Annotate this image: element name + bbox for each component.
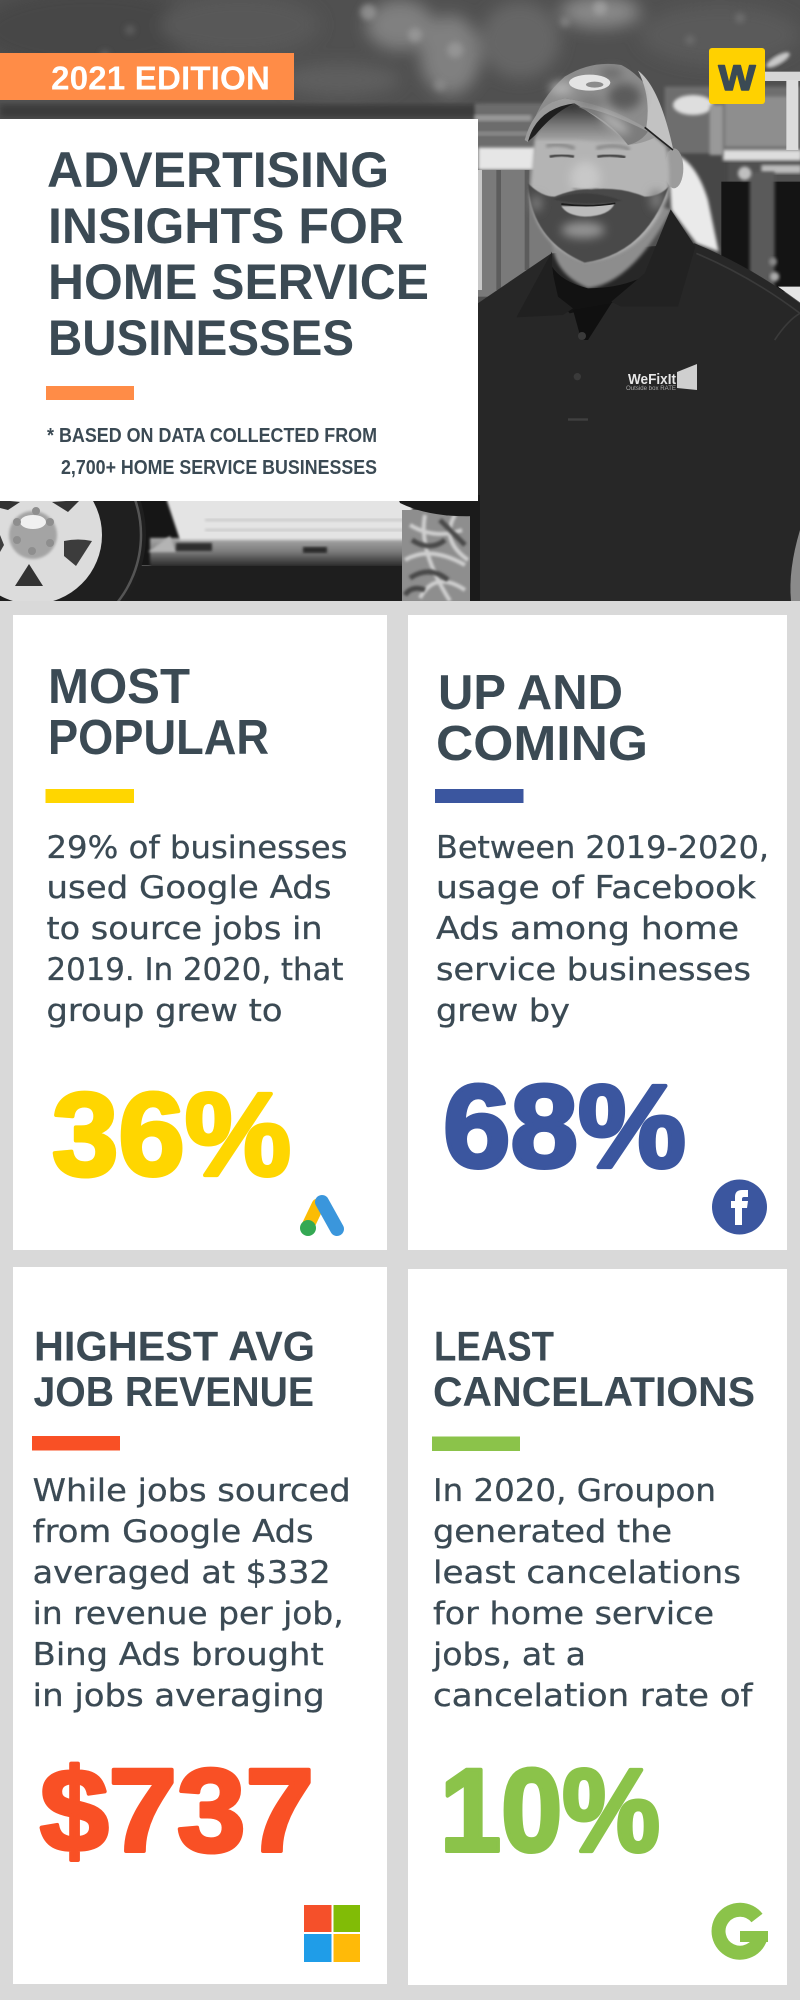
wheel — [0, 501, 146, 601]
logo badge: W: W — [718, 59, 756, 98]
big number: 68% — [443, 1061, 686, 1193]
body text: While jobs sourced — [33, 1473, 351, 1509]
cap camo patches — [550, 68, 641, 137]
nose — [570, 162, 600, 189]
edition banner — [0, 53, 294, 100]
bottom-left white truck — [124, 501, 414, 601]
body text: Bing Ads brought — [33, 1637, 324, 1673]
title: ADVERTISING — [47, 142, 389, 198]
icon: groupon G — [719, 1910, 768, 1953]
body text: averaged at $332 — [33, 1555, 331, 1591]
face — [528, 134, 670, 262]
beard — [528, 183, 669, 263]
title — [47, 142, 429, 366]
background truck and van — [475, 50, 800, 303]
body text: 2019. In 2020, that — [46, 952, 344, 988]
accent bar — [432, 1436, 520, 1451]
panel: highest avg job revenue — [13, 1267, 387, 1984]
body text — [33, 1473, 351, 1714]
body text: from Google Ads — [33, 1514, 314, 1550]
panel: up and coming — [408, 615, 787, 1250]
heading: JOB REVENUE — [34, 1368, 314, 1415]
undershirt — [552, 267, 640, 313]
title panel — [0, 119, 478, 501]
moustache and mouth — [556, 194, 620, 203]
accent bar — [46, 386, 134, 400]
tattooed arm — [398, 495, 800, 601]
body text: cancelation rate of — [433, 1678, 754, 1714]
source note: * BASED ON DATA COLLECTED FROM — [47, 425, 377, 447]
logo badge: W — [709, 48, 765, 104]
heading: POPULAR — [48, 711, 269, 765]
icon: google ads — [300, 1202, 337, 1236]
body text: grew by — [436, 993, 570, 1029]
accent bar — [32, 1436, 120, 1450]
neck — [552, 200, 671, 288]
body text: usage of Facebook — [436, 870, 756, 906]
accent bar — [435, 789, 524, 803]
body text: generated the — [433, 1514, 672, 1550]
shirt logo: WeFixIt — [628, 371, 676, 388]
body text — [46, 830, 348, 1029]
body text: 29% of businesses — [46, 830, 348, 866]
big number: 10% — [440, 1745, 660, 1877]
heading — [436, 666, 648, 771]
icon: facebook — [712, 1180, 767, 1234]
icon: microsoft — [304, 1905, 360, 1962]
heading: LEAST — [434, 1322, 554, 1370]
shirt — [468, 243, 800, 607]
panel: most popular — [13, 615, 387, 1250]
accent bar — [46, 789, 134, 803]
man: shirt, neck, head and cap — [468, 64, 800, 607]
title: INSIGHTS FOR — [48, 198, 404, 254]
heading — [48, 660, 269, 765]
big number: 36% — [52, 1069, 291, 1201]
forehead shade — [535, 103, 628, 145]
title: HOME SERVICE — [48, 254, 429, 310]
heading: COMING — [436, 717, 648, 771]
body text: Ads among home — [436, 911, 739, 947]
body text — [436, 830, 769, 1029]
heading — [433, 1322, 755, 1415]
body text: in revenue per job, — [33, 1596, 344, 1632]
panel: least cancelations — [408, 1269, 787, 1985]
body text: In 2020, Groupon — [433, 1473, 716, 1509]
shirt logo — [626, 364, 697, 392]
body text: jobs, at a — [432, 1637, 586, 1673]
heading: HIGHEST AVG — [34, 1322, 315, 1370]
edition banner: 2021 EDITION — [51, 60, 270, 96]
body text: least cancelations — [433, 1555, 741, 1591]
placket buttons — [578, 332, 586, 340]
eyes and brows — [546, 145, 630, 149]
body text: service businesses — [436, 952, 751, 988]
ear — [665, 148, 683, 188]
body text: used Google Ads — [46, 870, 332, 906]
body text — [432, 1473, 754, 1714]
cap crown — [536, 64, 653, 133]
shirt logo: Outside box RATE — [626, 386, 676, 392]
heading: MOST — [48, 660, 190, 714]
body text: in jobs averaging — [33, 1678, 325, 1714]
source note: 2,700+ HOME SERVICE BUSINESSES — [61, 457, 377, 479]
heading: CANCELATIONS — [433, 1368, 755, 1415]
collar — [550, 252, 572, 312]
big number: $737 — [40, 1745, 314, 1877]
title: BUSINESSES — [48, 310, 354, 366]
body text: for home service — [433, 1596, 714, 1632]
source note — [47, 425, 377, 479]
heading — [34, 1322, 315, 1415]
body text: Between 2019-2020, — [436, 830, 769, 866]
hero photo: man in cap in front of work truck — [0, 0, 800, 648]
body text: to source jobs in — [46, 911, 322, 947]
cap brim — [525, 98, 655, 145]
body text: group grew to — [46, 993, 282, 1029]
heading: UP AND — [438, 666, 623, 720]
